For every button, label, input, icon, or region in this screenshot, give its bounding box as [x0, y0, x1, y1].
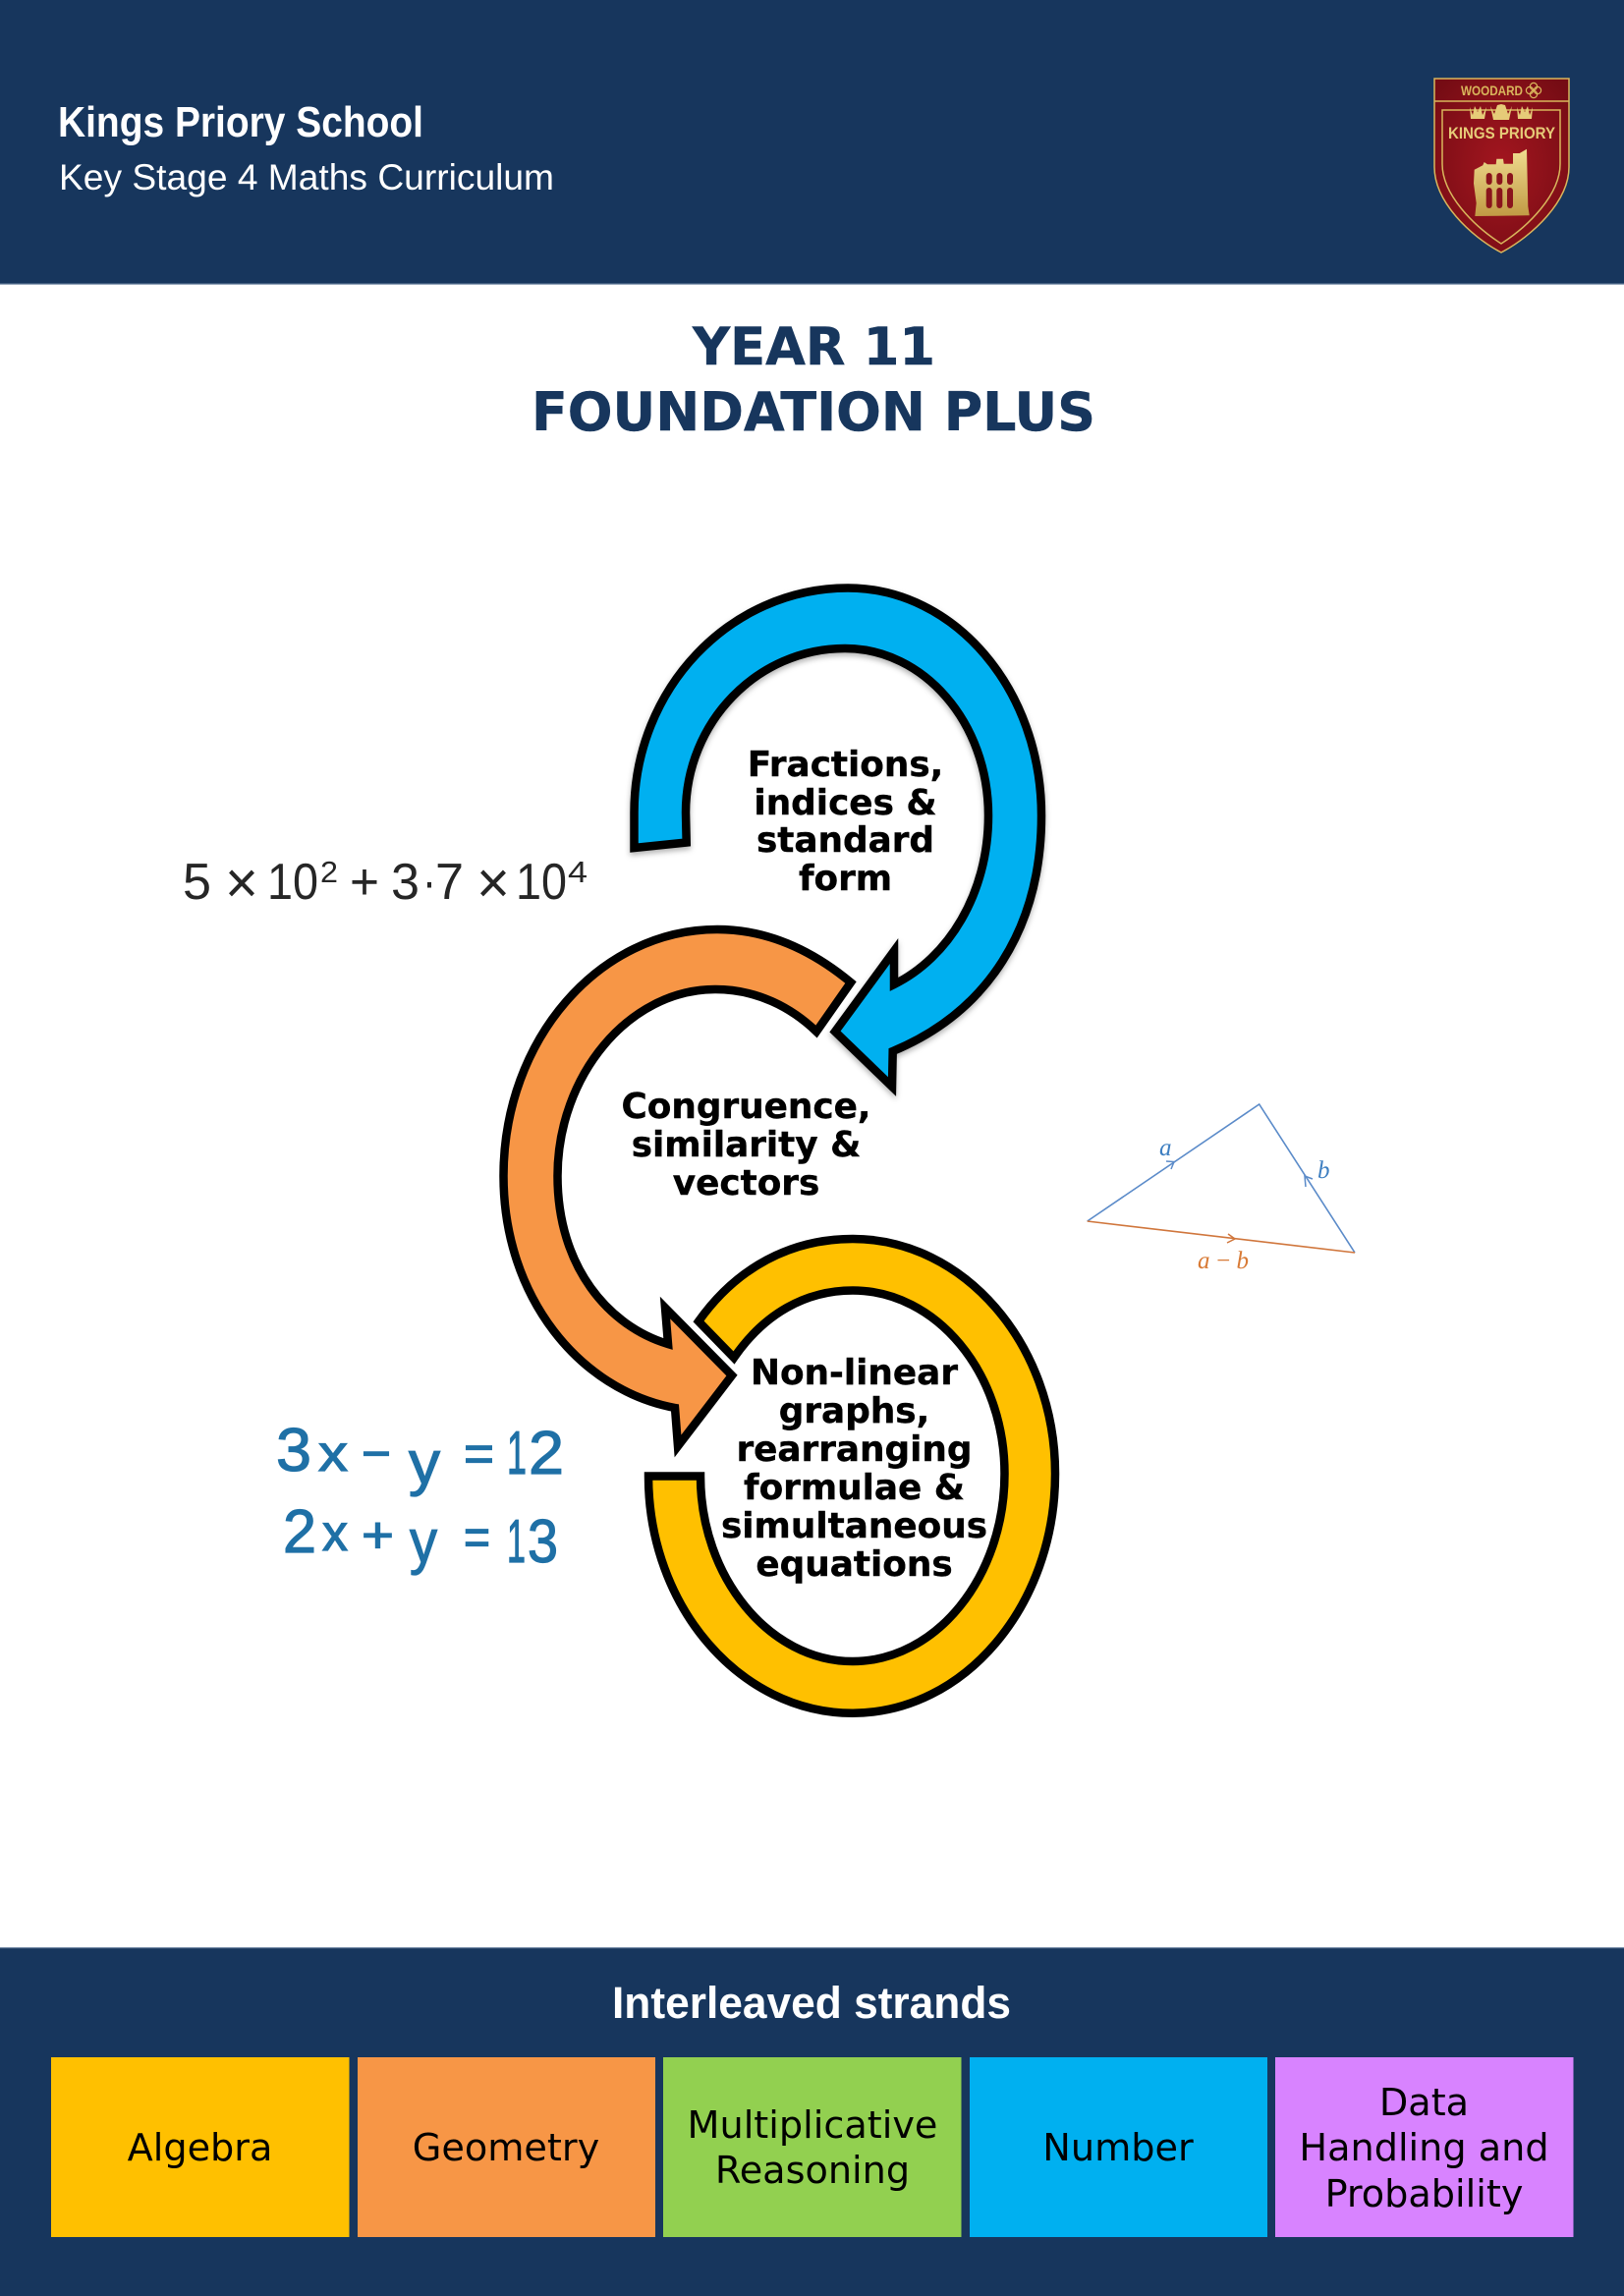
simultaneous equations: = — [464, 1426, 494, 1483]
icon: school crest: WOODARD — [1461, 83, 1523, 98]
standard form expression: 7 — [435, 854, 464, 911]
text: topic 3: graphs, — [779, 1391, 929, 1431]
strand: multiplicative reasoning: Multiplicative — [688, 2104, 937, 2148]
simultaneous equations: 1 — [507, 1420, 527, 1487]
text: topic 2: vectors — [673, 1163, 819, 1204]
strand: data handling and probability — [1275, 2057, 1574, 2237]
text: topic 1: standard — [756, 820, 934, 861]
standard form expression: × — [225, 850, 258, 916]
strand: algebra — [51, 2057, 350, 2237]
strand: data handling and probability: Probability — [1325, 2173, 1523, 2216]
vector triangle diagram: a — [1159, 1135, 1171, 1161]
strand: multiplicative reasoning — [663, 2057, 961, 2237]
strand: multiplicative reasoning: Reasoning — [715, 2150, 910, 2193]
title: YEAR 11 — [692, 317, 935, 377]
strand: algebra: Algebra — [128, 2127, 272, 2170]
footer band — [0, 1947, 1624, 2296]
simultaneous equations: x — [322, 1505, 348, 1562]
standard form expression: 5 — [183, 854, 211, 911]
text: topic 2: similarity & — [632, 1125, 861, 1165]
standard form expression: 10 — [516, 854, 567, 911]
arrow: algebra strand, yellow — [648, 1239, 1055, 1713]
strand: data handling and probability: Handling and — [1299, 2127, 1549, 2170]
arrow: number strand, blue — [635, 588, 1041, 1087]
standard form expression: 3 — [391, 854, 420, 911]
text: topic 2 — [622, 1087, 870, 1204]
standard form expression: 2 — [320, 855, 338, 889]
subtitle: Key Stage 4 Maths Curriculum — [59, 157, 554, 197]
text: topic 3 — [721, 1353, 987, 1585]
simultaneous equations: 2 — [283, 1498, 316, 1566]
text: topic 3: formulae & — [744, 1468, 965, 1508]
strand: number: Number — [1042, 2127, 1194, 2170]
text: topic 1: indices & — [754, 783, 937, 823]
strand: geometry — [358, 2057, 655, 2237]
arrow: geometry strand, orange — [503, 929, 851, 1446]
standard form expression: × — [476, 850, 510, 916]
text: topic 3: Non-linear — [751, 1353, 958, 1393]
title: FOUNDATION PLUS — [532, 381, 1095, 443]
simultaneous equations — [276, 1417, 564, 1576]
simultaneous equations: 1 — [507, 1508, 526, 1576]
standard form expression: 10 — [267, 854, 318, 911]
simultaneous equations: 2 — [529, 1420, 564, 1487]
simultaneous equations: = — [464, 1509, 490, 1566]
standard form expression: + — [350, 854, 379, 911]
standard form expression — [183, 850, 588, 916]
text: topic 1: form — [799, 859, 892, 899]
simultaneous equations: − — [362, 1426, 391, 1483]
simultaneous equations: + — [362, 1507, 394, 1564]
icon: school crest — [1434, 79, 1569, 252]
text: topic 3: rearranging — [736, 1429, 973, 1470]
standard form expression: · — [422, 854, 436, 911]
strand: data handling and probability: Data — [1379, 2082, 1469, 2125]
strand: number — [970, 2057, 1267, 2237]
simultaneous equations: 3 — [276, 1417, 311, 1484]
title — [532, 317, 1095, 443]
simultaneous equations: x — [318, 1426, 348, 1483]
text: topic 2: Congruence, — [622, 1087, 870, 1127]
simultaneous equations: y — [410, 1508, 437, 1576]
school name: Kings Priory School — [58, 98, 423, 146]
standard form expression: 4 — [568, 855, 588, 889]
strand: geometry: Geometry — [413, 2127, 599, 2170]
text: topic 3: simultaneous — [721, 1506, 987, 1546]
simultaneous equations: y — [409, 1429, 440, 1497]
simultaneous equations: 3 — [528, 1508, 558, 1576]
vector triangle diagram — [1088, 1104, 1355, 1274]
footer heading: Interleaved strands — [612, 1978, 1011, 2028]
vector triangle diagram: a − b — [1198, 1248, 1249, 1274]
header band — [0, 0, 1624, 285]
text: topic 1 — [748, 745, 943, 899]
vector triangle diagram: b — [1317, 1157, 1330, 1184]
icon: school crest: KINGS PRIORY — [1448, 124, 1556, 142]
text: topic 1: Fractions, — [748, 745, 943, 785]
text: topic 3: equations — [756, 1544, 953, 1585]
